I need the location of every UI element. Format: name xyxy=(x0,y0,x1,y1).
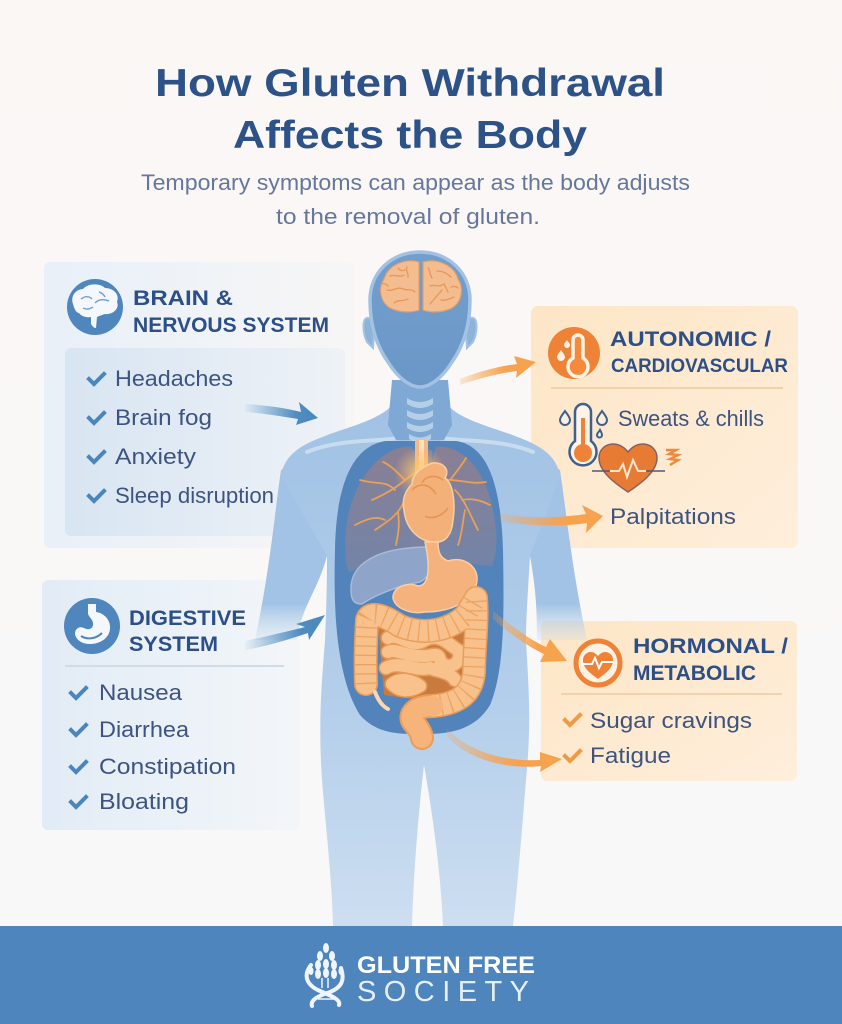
title: How Gluten Withdrawal xyxy=(155,62,665,105)
panel: hormonal metabolic xyxy=(541,621,797,781)
panel: digestive system xyxy=(42,580,300,830)
shoulder highlights xyxy=(307,437,533,452)
torso and legs xyxy=(281,385,560,926)
panel: autonomic cardiovascular xyxy=(531,306,798,548)
heading: DIGESTIVE xyxy=(129,607,246,630)
neck spine xyxy=(407,398,433,442)
body cavity xyxy=(335,441,504,734)
heading xyxy=(633,635,788,685)
logo wordmark xyxy=(357,952,535,1008)
title: Affects the Body xyxy=(233,114,587,157)
large intestine xyxy=(366,598,477,738)
heading: HORMONAL / xyxy=(633,635,788,658)
symptom list: Diarrhea xyxy=(99,717,189,742)
heading xyxy=(129,607,246,656)
liver xyxy=(351,547,433,604)
icon: thermometer badge xyxy=(548,327,600,379)
symptom list: Constipation xyxy=(99,754,236,779)
small intestine xyxy=(378,625,466,700)
subtitle xyxy=(141,170,690,229)
logo mark: wheat and helix xyxy=(307,943,344,1006)
symptom list: Bloating xyxy=(99,789,189,814)
symptom list: Anxiety xyxy=(115,444,197,469)
symptom list: Headaches xyxy=(115,366,233,391)
symptom: sweats and chills: Sweats & chills xyxy=(618,406,764,431)
symptom list xyxy=(89,366,274,508)
heading: METABOLIC xyxy=(633,662,756,685)
icon: thermometer with drops xyxy=(560,404,607,465)
icon: stomach xyxy=(64,598,120,654)
heading: CARDIOVASCULAR xyxy=(611,356,788,377)
heading: SYSTEM xyxy=(129,633,218,656)
subtitle: to the removal of gluten. xyxy=(276,204,540,229)
symptom list xyxy=(71,680,236,814)
head xyxy=(364,252,476,387)
heading: BRAIN & xyxy=(133,287,233,310)
subtitle: Temporary symptoms can appear as the body adjusts xyxy=(141,170,690,195)
arrow: to palpitations xyxy=(500,505,603,533)
symptom list: Fatigue xyxy=(590,743,671,768)
footer band xyxy=(0,926,842,1024)
glow xyxy=(394,446,446,498)
heading xyxy=(610,328,788,377)
symptom list: Brain fog xyxy=(115,405,212,430)
panel: brain and nervous system xyxy=(44,262,354,548)
icon: brain xyxy=(67,279,123,335)
symptom: palpitations: Palpitations xyxy=(610,504,736,529)
heading: AUTONOMIC / xyxy=(610,328,771,351)
neck xyxy=(388,380,452,440)
arrow: brain to body xyxy=(245,402,318,425)
symptom list: Nausea xyxy=(99,680,183,705)
stomach xyxy=(393,542,477,613)
heading: NERVOUS SYSTEM xyxy=(133,314,329,337)
icon: heart with pulse xyxy=(592,444,678,492)
lungs xyxy=(345,447,496,572)
symptom list xyxy=(565,708,752,768)
human body figure xyxy=(255,252,587,926)
logo wordmark: SOCIETY xyxy=(357,976,529,1008)
heading xyxy=(133,287,329,337)
brain illustration xyxy=(381,261,461,312)
heart xyxy=(403,463,454,542)
title xyxy=(155,62,665,157)
arms xyxy=(255,440,587,640)
arrow: digestive to body xyxy=(245,615,325,650)
windpipe xyxy=(415,440,428,480)
arrow: to fatigue xyxy=(447,729,562,772)
arrow: to hormonal panel xyxy=(493,611,567,662)
symptom list: Sugar cravings xyxy=(590,708,752,733)
icon: heart badge xyxy=(576,641,620,685)
symptom list: Sleep disruption xyxy=(115,483,274,508)
arrow: to autonomic panel xyxy=(460,356,536,385)
logo wordmark: GLUTEN FREE xyxy=(357,952,535,979)
bronchial branches xyxy=(355,458,490,545)
